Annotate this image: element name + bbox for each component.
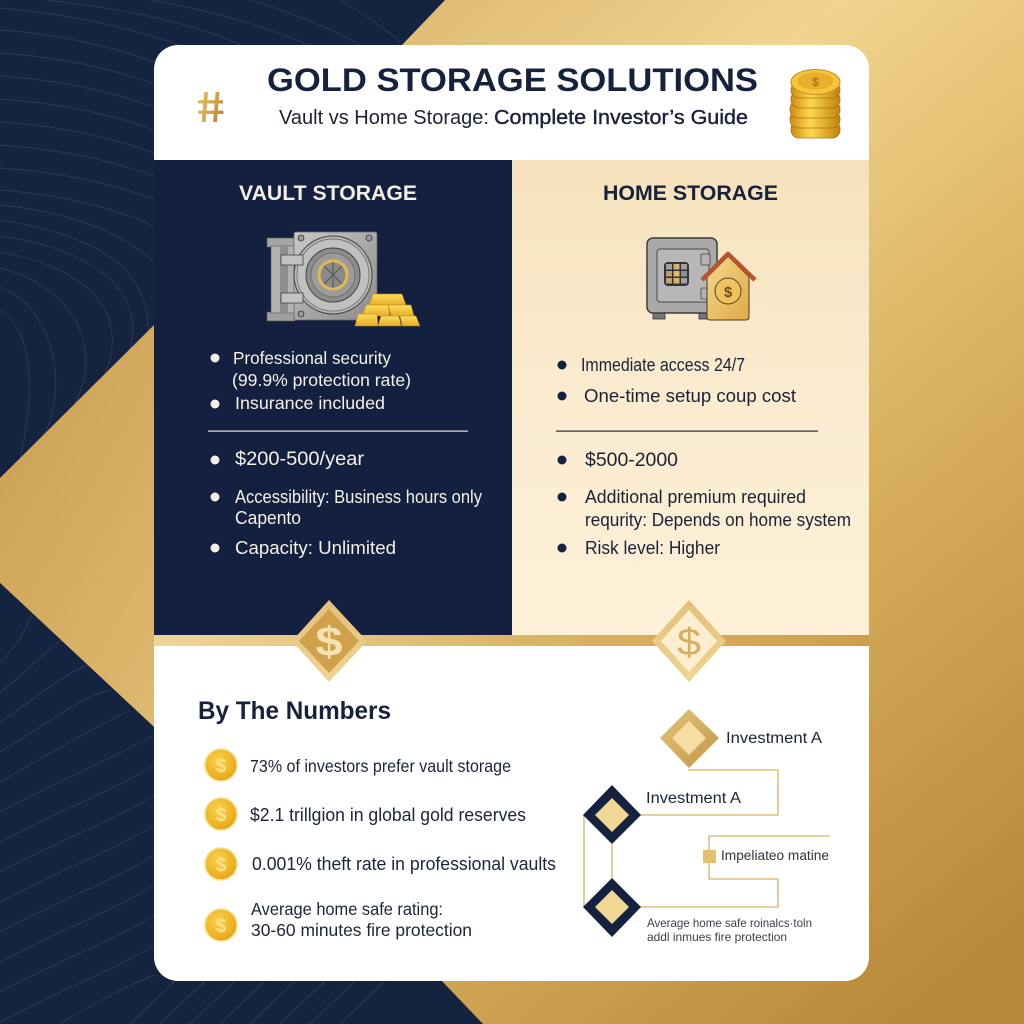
stat: theft rate <box>205 848 556 880</box>
subtitle <box>279 106 748 129</box>
list: vault details: Capacity: Unlimited <box>235 537 396 558</box>
panel: by the numbers <box>198 697 556 941</box>
list: vault details <box>210 449 482 558</box>
list: vault benefits: Professional security <box>233 348 391 368</box>
list: home details <box>558 450 851 558</box>
node: navy diamond upper <box>583 785 641 844</box>
panel: vault storage <box>208 181 482 558</box>
panel: home storage <box>556 181 851 558</box>
header <box>193 62 840 138</box>
stat: theft rate: 0.001% theft rate in professional vaults <box>252 853 556 874</box>
connector lines <box>584 769 830 907</box>
node: small gold square <box>703 850 716 863</box>
heading: vault storage: VAULT STORAGE <box>239 181 417 205</box>
caption: addl inmues fire protection <box>647 930 787 944</box>
badge: left dollar diamond: $ <box>316 618 342 665</box>
label: small square: Impeliateo matine <box>721 848 829 863</box>
list: home details: Additional premium required <box>585 487 806 507</box>
badge: left dollar diamond <box>292 600 367 682</box>
background: bottom-left navy with contour lines <box>0 583 483 1024</box>
list: home details: requrity: Depends on home system <box>585 510 851 530</box>
title: GOLD STORAGE SOLUTIONS <box>267 62 758 98</box>
panel: vault storage background <box>154 160 512 636</box>
stat: fire protection: $ <box>216 916 227 937</box>
stat: global reserves <box>205 798 526 830</box>
badge: right dollar diamond: $ <box>677 622 701 664</box>
stat: vault preference <box>205 749 511 781</box>
subtitle: Vault vs Home Storage: <box>279 106 489 129</box>
icon: home safe and house <box>647 238 755 320</box>
stat: global reserves: $ <box>216 805 227 826</box>
icon: home safe and house: $ <box>724 284 733 301</box>
stat: vault preference: $ <box>216 756 227 777</box>
icon: hash mark: # <box>193 83 229 132</box>
divider band <box>154 635 869 646</box>
flow diagram <box>583 709 830 944</box>
icon: gold coin stack <box>790 70 840 138</box>
card <box>154 45 869 981</box>
icon: vault with gold bars <box>267 232 420 326</box>
list: home benefits: Immediate access 24/7 <box>581 355 745 375</box>
caption <box>647 916 812 944</box>
node: navy diamond lower <box>583 878 641 937</box>
icon: gold coin stack: $ <box>812 75 819 89</box>
panel: home storage background <box>512 160 869 636</box>
background: top-left contour lines <box>0 0 400 458</box>
heading: home storage: HOME STORAGE <box>603 181 778 205</box>
list: vault benefits <box>210 348 411 413</box>
list: vault details: Capento <box>235 508 301 528</box>
heading: by the numbers: By The Numbers <box>198 697 391 725</box>
background: gold left wedge <box>0 325 300 860</box>
subtitle: Complete Investor’s Guide <box>494 106 748 129</box>
stat: theft rate: $ <box>216 855 227 876</box>
label: investment A top: Investment A <box>726 730 823 747</box>
list: home details: $500-2000 <box>585 450 678 471</box>
list: vault benefits: (99.9% protection rate) <box>232 370 411 390</box>
list: vault details: Accessibility: Business hours only <box>235 487 482 507</box>
caption: Average home safe roinalcs·toln <box>647 916 812 930</box>
list: vault details: $200-500/year <box>235 449 365 470</box>
label: investment A middle: Investment A <box>646 790 742 807</box>
node: top gold diamond <box>660 709 719 768</box>
stat: global reserves: $2.1 trillgion in global gold reserves <box>250 804 526 825</box>
list: vault benefits: Insurance included <box>235 393 385 413</box>
stat: fire protection: Average home safe rating: <box>251 899 443 919</box>
badge: right dollar diamond <box>652 600 726 682</box>
stat: fire protection <box>205 899 472 941</box>
list: home benefits <box>558 355 796 406</box>
list: home benefits: One-time setup coup cost <box>584 385 796 406</box>
list: home details: Risk level: Higher <box>585 538 720 558</box>
stat: vault preference: 73% of investors prefer vault storage <box>250 756 511 776</box>
stat: fire protection: 30-60 minutes fire protection <box>251 920 472 940</box>
